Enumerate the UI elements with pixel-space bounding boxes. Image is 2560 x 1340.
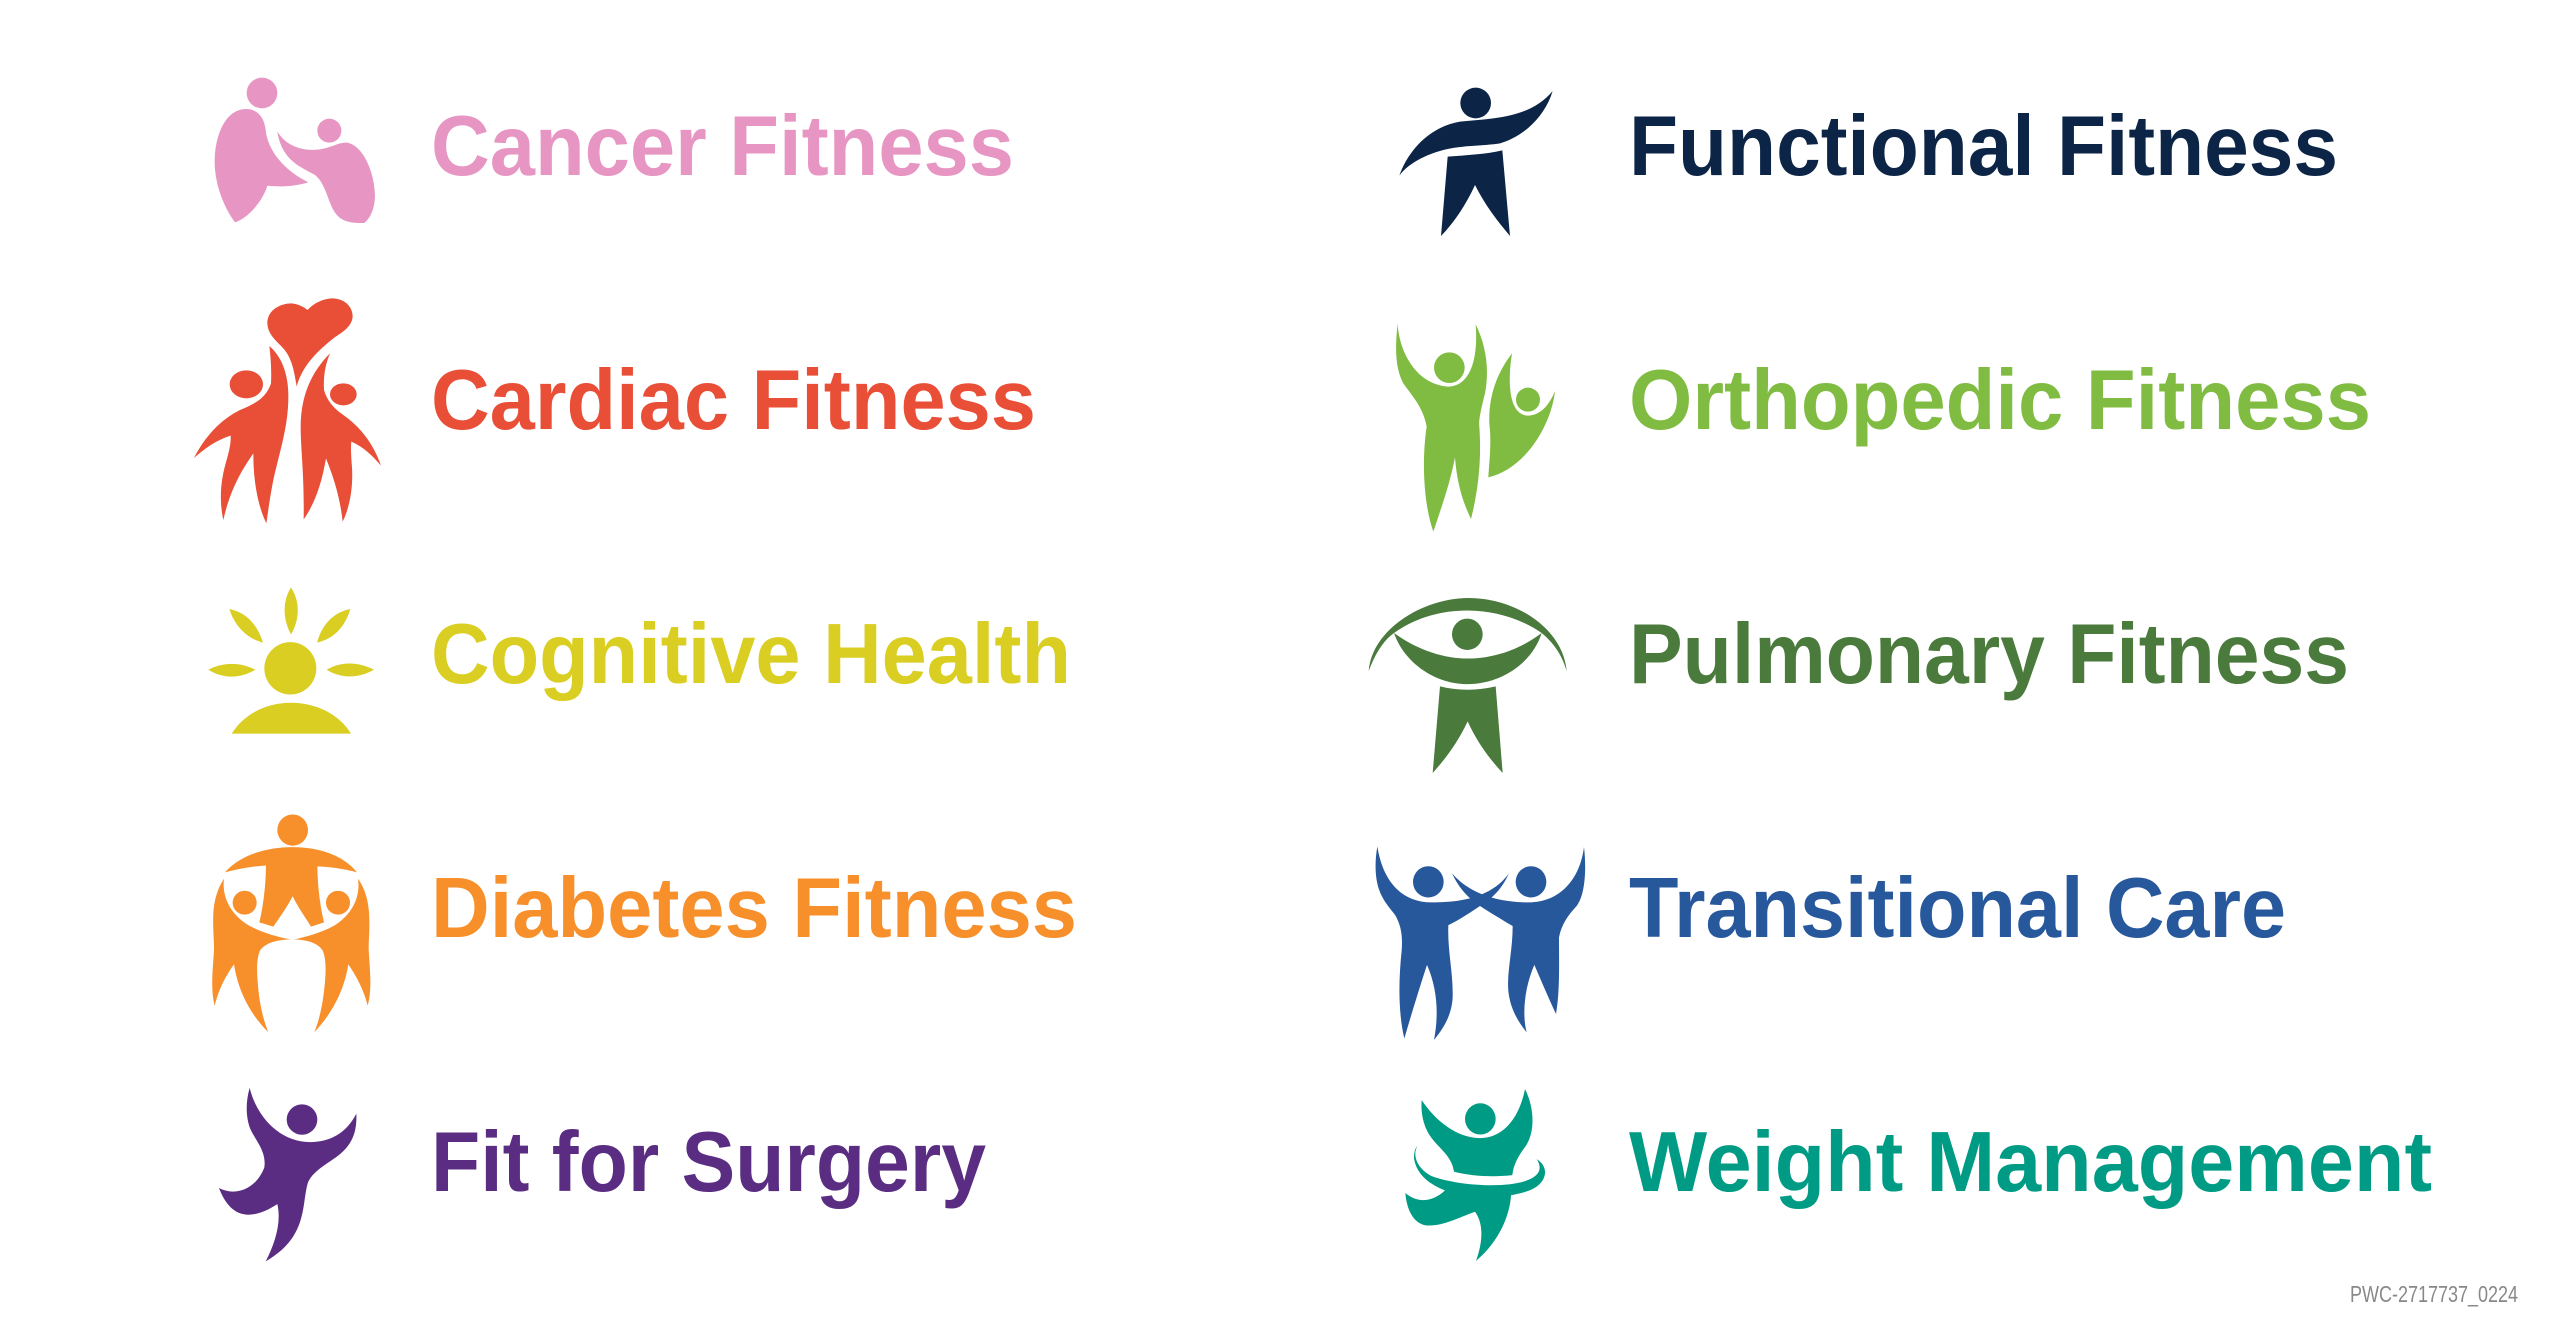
icon: functional fitness figure <box>1399 88 1553 236</box>
icon: weight management figure with hoop <box>1405 1089 1545 1261</box>
label: Diabetes Fitness: Diabetes Fitness <box>431 861 1077 956</box>
row: Diabetes Fitness <box>212 814 1077 1032</box>
icon: diabetes fitness figures <box>212 814 370 1032</box>
label: Transitional Care: Transitional Care <box>1629 861 2286 956</box>
icon: orthopedic fitness figures <box>1396 323 1555 532</box>
row: Transitional Care <box>1376 847 2286 1040</box>
icon: cancer fitness figures <box>215 78 375 223</box>
label: Orthopedic Fitness: Orthopedic Fitness <box>1629 353 2371 448</box>
icon: cardiac fitness heart and figures <box>194 298 381 523</box>
row: Cognitive Health <box>208 587 1071 734</box>
row: Pulmonary Fitness <box>1369 598 2349 773</box>
label: Functional Fitness: Functional Fitness <box>1629 99 2338 194</box>
footer: document code: PWC-2717737_0224 <box>2350 1281 2518 1307</box>
row: Weight Management <box>1405 1089 2432 1261</box>
row: Fit for Surgery <box>219 1088 986 1262</box>
row: Cancer Fitness <box>215 78 1014 223</box>
icon: transitional care figures <box>1376 847 1585 1040</box>
label: Cardiac Fitness: Cardiac Fitness <box>431 353 1036 448</box>
label: Cancer Fitness: Cancer Fitness <box>431 99 1014 194</box>
row: Orthopedic Fitness <box>1396 323 2371 532</box>
row: Functional Fitness <box>1399 88 2338 236</box>
label: Cognitive Health: Cognitive Health <box>431 607 1071 702</box>
label: Pulmonary Fitness: Pulmonary Fitness <box>1629 607 2349 702</box>
icon: pulmonary fitness figure <box>1369 598 1567 773</box>
label: Weight Management: Weight Management <box>1629 1115 2432 1210</box>
icon: cognitive health sun <box>208 587 374 734</box>
icon: fit for surgery figure <box>219 1088 356 1262</box>
label: Fit for Surgery: Fit for Surgery <box>431 1115 986 1210</box>
row: Cardiac Fitness <box>194 298 1036 523</box>
